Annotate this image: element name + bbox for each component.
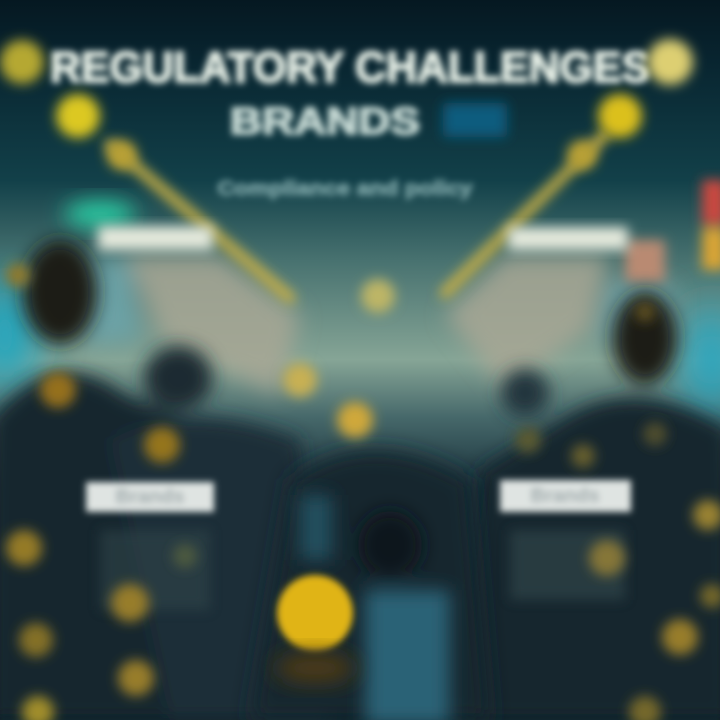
left silhouettes xyxy=(0,240,330,720)
center figures xyxy=(300,495,450,720)
badge: blue xyxy=(443,103,507,137)
label: lower left xyxy=(86,482,214,512)
right rule lines panel xyxy=(510,530,625,600)
panel: top-right colored chart xyxy=(625,180,720,282)
label: upper left xyxy=(98,226,213,250)
icon: large yellow coin xyxy=(277,575,353,651)
panel: top-left green glow xyxy=(64,201,136,227)
right silhouettes xyxy=(455,292,720,720)
label: lower right xyxy=(500,480,631,512)
arrow: right diagonal xyxy=(445,135,605,293)
panel: right wing chart xyxy=(445,255,675,390)
label: upper right xyxy=(508,227,628,250)
label: lower right: Brands xyxy=(531,485,599,507)
label: lower left: Brands xyxy=(116,486,184,508)
center silhouettes xyxy=(250,450,490,720)
panel: left wing chart xyxy=(70,255,300,395)
subtitle: BRANDS xyxy=(230,101,420,143)
coin glow xyxy=(275,653,355,683)
title: REGULATORY CHALLENGES xyxy=(50,43,650,92)
caption: Compliance and policy xyxy=(218,178,474,200)
panel: side glow xyxy=(0,280,720,415)
title xyxy=(50,43,650,200)
arrow: left diagonal xyxy=(110,145,290,298)
left rule lines panel xyxy=(100,530,210,610)
